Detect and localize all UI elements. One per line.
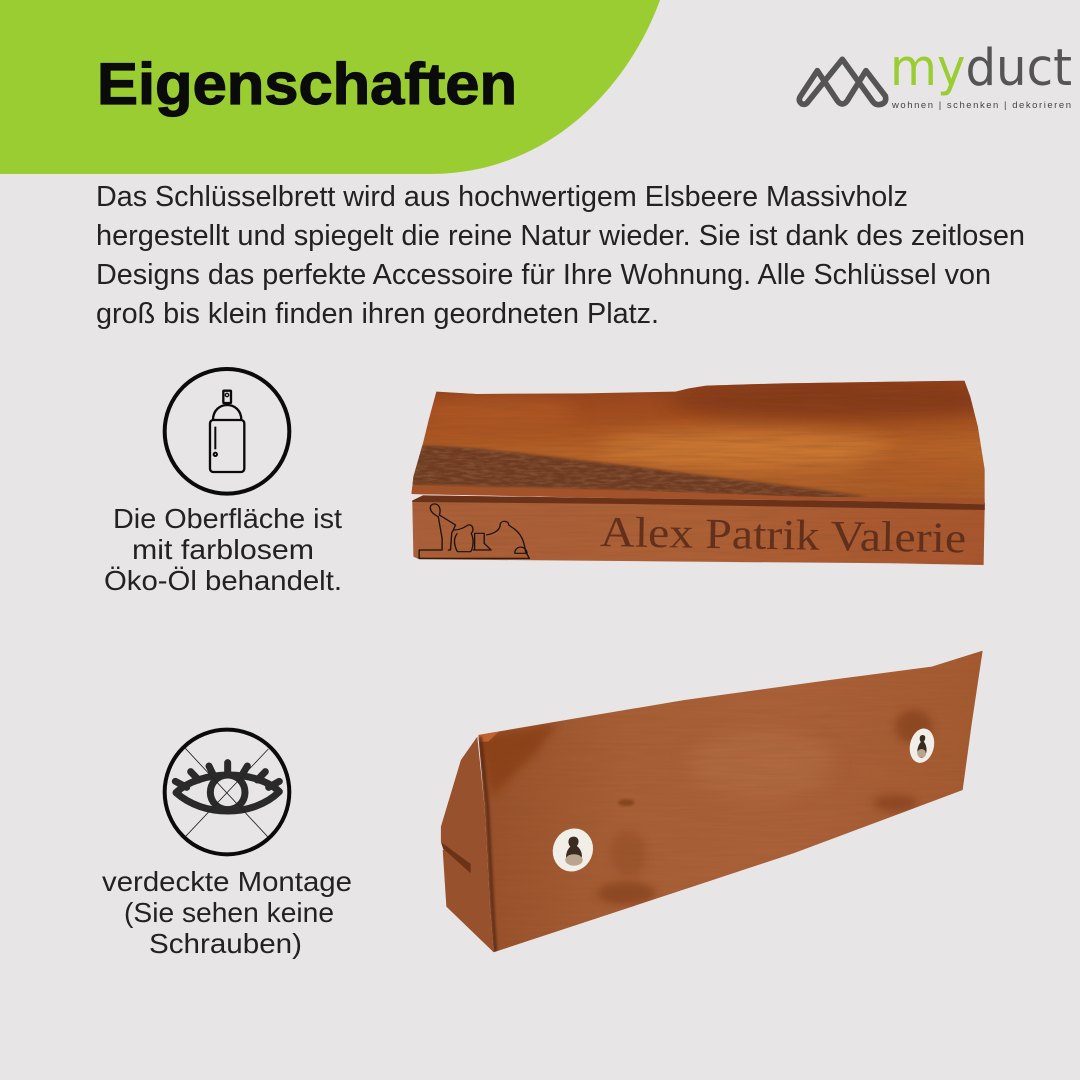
logo mark: mountains — [799, 59, 886, 105]
caption: hidden mounting: Schrauben) — [149, 928, 302, 959]
intro paragraph: Das Schlüsselbrett wird aus hochwertigem Elsbeere Massivholz — [96, 181, 908, 213]
side end grain — [441, 737, 494, 952]
back face — [474, 647, 990, 957]
logo wordmark: myduct — [890, 39, 1072, 98]
caption: surface oil: Die Oberfläche ist — [113, 503, 342, 534]
intro paragraph: hergestellt und spiegelt die reine Natur wieder. Sie ist dank des zeitlosen — [96, 220, 1025, 252]
slot — [441, 842, 471, 873]
lower front plank — [412, 495, 985, 565]
green header shape — [0, 0, 660, 174]
caption: hidden mounting — [102, 866, 352, 959]
keyhole left — [548, 825, 597, 875]
icon: spray can — [165, 369, 289, 494]
caption: hidden mounting: verdeckte Montage — [102, 866, 352, 897]
caption: surface oil — [104, 503, 342, 596]
title: Eigenschaften — [97, 52, 517, 117]
photo: wooden key board with engraved names — [408, 378, 1012, 565]
logo tagline: wohnen | schenken | dekorieren — [891, 100, 1071, 111]
intro paragraph — [96, 181, 1025, 330]
keyhole right — [907, 727, 937, 765]
engraved names: Alex Patrik Valerie — [600, 509, 967, 562]
caption: surface oil: Öko-Öl behandelt. — [104, 565, 342, 596]
logo: myduct — [799, 39, 1072, 111]
caption: surface oil: mit farblosem — [132, 534, 314, 565]
engraved figures — [419, 504, 529, 558]
upper sloped plank — [408, 378, 1012, 508]
caption: hidden mounting: (Sie sehen keine — [124, 897, 334, 928]
intro paragraph: groß bis klein finden ihren geordneten Platz. — [96, 298, 659, 330]
intro paragraph: Designs das perfekte Accessoire für Ihre Wohnung. Alle Schlüssel von — [96, 259, 991, 291]
icon: crossed-out eye — [165, 730, 289, 854]
photo: back of wooden board with keyholes — [441, 647, 990, 957]
